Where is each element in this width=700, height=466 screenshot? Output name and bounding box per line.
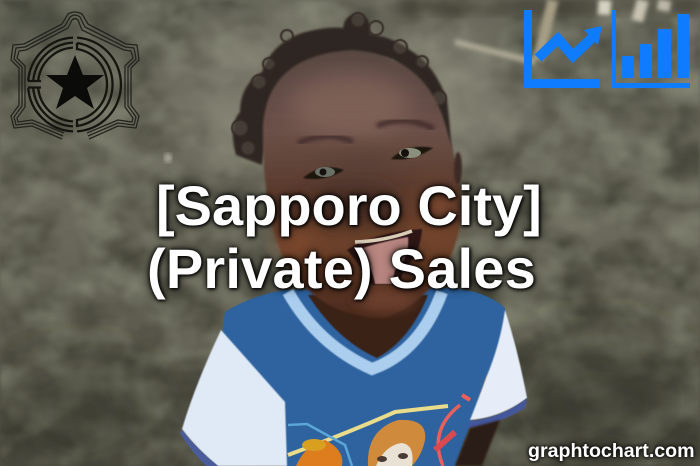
emblem outer frame xyxy=(11,12,139,139)
neck xyxy=(308,295,428,358)
shirt collar xyxy=(288,292,442,369)
hair xyxy=(232,13,452,165)
shirt cartoon print xyxy=(288,395,470,466)
mouth xyxy=(347,229,422,285)
icon: bar chart xyxy=(612,10,690,88)
emblem star xyxy=(46,55,104,109)
left sleeve xyxy=(182,330,287,466)
title: metric name: (Private) Sales xyxy=(147,237,536,300)
right sleeve xyxy=(470,310,527,420)
eyebrows and eyes xyxy=(298,121,434,179)
face xyxy=(263,50,460,318)
shirt body xyxy=(222,288,505,466)
emblem rings xyxy=(28,38,121,131)
title: city name: [Sapporo City] xyxy=(156,174,542,237)
background: blurred stakes xyxy=(455,0,665,62)
right arm xyxy=(455,420,500,466)
source label: graphtochart.com xyxy=(528,440,695,462)
icon: line chart with arrow xyxy=(524,10,602,88)
